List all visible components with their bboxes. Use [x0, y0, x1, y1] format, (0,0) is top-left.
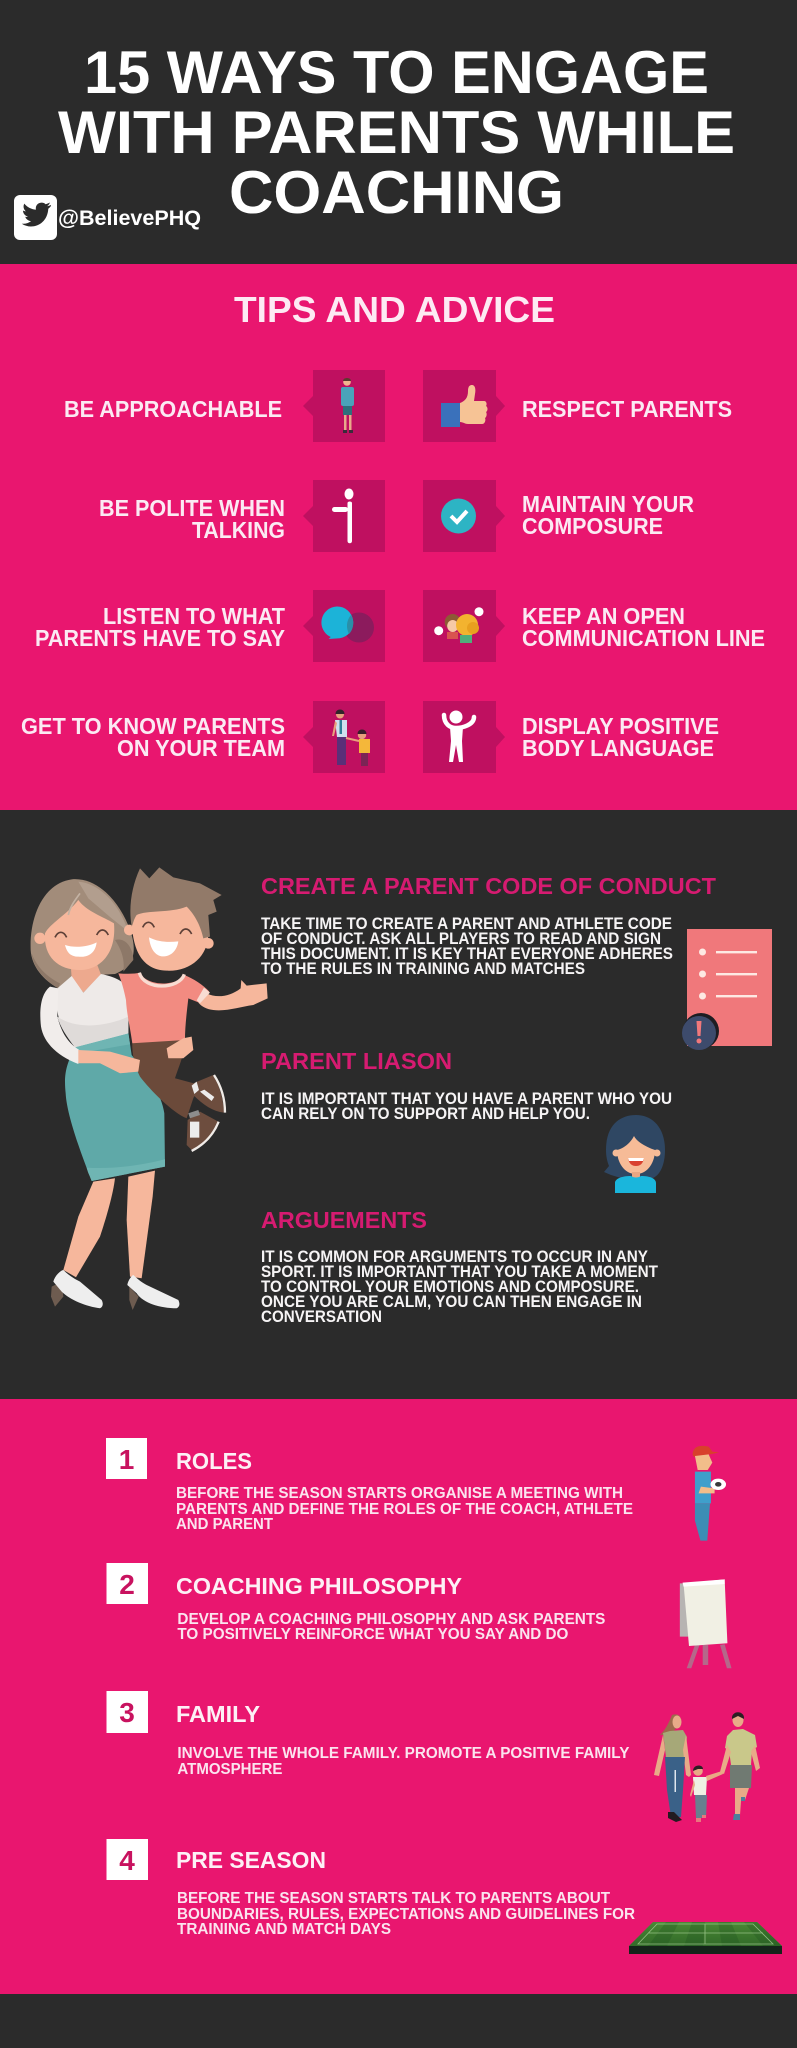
- block: create a parent code of conduct: THIS DOCUMENT. IT IS KEY THAT EVERYONE ADHERES: [261, 945, 673, 963]
- step 4: pre season: BEFORE THE SEASON STARTS TALK TO PARENTS ABOUT: [177, 1890, 610, 1907]
- icon: rules document: [682, 929, 772, 1050]
- tip: display positive body language: BODY LANGUAGE: [522, 735, 714, 761]
- block: arguements: SPORT. IT IS IMPORTANT THAT YOU TAKE A MOMENT: [261, 1263, 658, 1281]
- tip: maintain your composure: COMPOSURE: [522, 513, 663, 539]
- block: arguements: ARGUEMENTS: [261, 1207, 427, 1233]
- tip: be approachable: [64, 370, 385, 442]
- block: parent liason: IT IS IMPORTANT THAT YOU HAVE A PARENT WHO YOU: [261, 1090, 672, 1108]
- title: [58, 39, 735, 226]
- step 1: roles: [106, 1438, 633, 1533]
- step 3: family: FAMILY: [176, 1701, 260, 1727]
- step 3: family: [106, 1691, 630, 1778]
- tip: listen to what parents have to say: LISTEN TO WHAT: [103, 603, 285, 629]
- tip: be approachable: BE APPROACHABLE: [64, 396, 282, 422]
- icon: football pitch: [629, 1922, 782, 1954]
- tip: get to know parents on your team: GET TO KNOW PARENTS: [21, 713, 285, 739]
- tip: listen to what parents have to say: [35, 590, 385, 662]
- step 2: coaching philosophy: DEVELOP A COACHING PHILOSOPHY AND ASK PARENTS: [177, 1611, 606, 1628]
- panel: header: [0, 0, 797, 264]
- step 3: family: 3: [119, 1697, 135, 1728]
- tip: respect parents: RESPECT PARENTS: [522, 396, 732, 422]
- step 1: roles: PARENTS AND DEFINE THE ROLES OF THE COACH, ATHLETE: [176, 1501, 633, 1518]
- panel: parent communication: [0, 810, 797, 1399]
- block: parent liason: PARENT LIASON: [261, 1048, 452, 1074]
- icon: smiling parent: [604, 1115, 665, 1193]
- block: create a parent code of conduct: [261, 873, 716, 978]
- tip: get to know parents on your team: ON YOUR TEAM: [117, 735, 285, 761]
- block: create a parent code of conduct: CREATE A PARENT CODE OF CONDUCT: [261, 873, 716, 899]
- step 3: family: INVOLVE THE WHOLE FAMILY. PROMOTE A POSITIVE FAMILY: [177, 1745, 630, 1762]
- title: WITH PARENTS WHILE: [58, 99, 735, 166]
- twitter handle: @BelievePHQ: [58, 207, 201, 230]
- tip: respect parents: [423, 370, 732, 442]
- tip: maintain your composure: [423, 480, 694, 552]
- tip: display positive body language: [423, 701, 719, 773]
- step 2: coaching philosophy: COACHING PHILOSOPHY: [176, 1573, 462, 1599]
- block: create a parent code of conduct: OF CONDUCT. ASK ALL PLAYERS TO READ AND SIGN: [261, 930, 661, 948]
- icon: coach with ball: [693, 1446, 726, 1541]
- tip: listen to what parents have to say: PARENTS HAVE TO SAY: [35, 625, 285, 651]
- block: create a parent code of conduct: TAKE TIME TO CREATE A PARENT AND ATHLETE CODE: [261, 915, 672, 933]
- step 1: roles: 1: [119, 1444, 134, 1475]
- tip: keep an open communication line: [423, 590, 765, 662]
- step 4: pre season: [106, 1839, 635, 1938]
- step 1: roles: BEFORE THE SEASON STARTS ORGANISE A MEETING WITH: [176, 1485, 623, 1502]
- step 2: coaching philosophy: [106, 1563, 606, 1643]
- step 2: coaching philosophy: 2: [119, 1569, 135, 1600]
- block: arguements: TO CONTROL YOUR EMOTIONS AND COMPOSURE.: [261, 1278, 639, 1296]
- step 4: pre season: 4: [119, 1845, 135, 1876]
- tip: get to know parents on your team: [21, 701, 385, 773]
- tip: maintain your composure: MAINTAIN YOUR: [522, 491, 694, 517]
- step 2: coaching philosophy: TO POSITIVELY REINFORCE WHAT YOU SAY AND DO: [177, 1626, 568, 1643]
- block: arguements: ONCE YOU ARE CALM, YOU CAN THEN ENGAGE IN: [261, 1293, 642, 1311]
- block: parent liason: CAN RELY ON TO SUPPORT AND HELP YOU.: [261, 1105, 590, 1123]
- tip: be polite when talking: BE POLITE WHEN: [99, 495, 285, 521]
- icon: twitter: [14, 195, 57, 240]
- panel: footer band: [0, 1994, 797, 2048]
- panel: tips and advice: [0, 264, 797, 810]
- step 4: pre season: PRE SEASON: [176, 1847, 326, 1873]
- step 3: family: ATMOSPHERE: [177, 1761, 283, 1778]
- block: parent liason: [261, 1048, 672, 1123]
- step 4: pre season: BOUNDARIES, RULES, EXPECTATIONS AND GUIDELINES FOR: [177, 1906, 635, 1923]
- block: arguements: CONVERSATION: [261, 1308, 382, 1326]
- panel: numbered steps: [0, 1399, 797, 1994]
- block: create a parent code of conduct: TO THE RULES IN TRAINING AND MATCHES: [261, 960, 585, 978]
- tip: be polite when talking: TALKING: [192, 517, 285, 543]
- tip: keep an open communication line: COMMUNICATION LINE: [522, 625, 765, 651]
- step 1: roles: AND PARENT: [176, 1516, 273, 1533]
- step 1: roles: ROLES: [176, 1448, 252, 1474]
- skirt: [65, 1033, 165, 1181]
- block: arguements: [261, 1207, 658, 1326]
- heading: tips and advice: TIPS AND ADVICE: [234, 289, 555, 330]
- icon: family walking: [654, 1712, 760, 1822]
- icon: flip chart: [680, 1579, 732, 1668]
- title: 15 WAYS TO ENGAGE: [84, 39, 709, 106]
- title: COACHING: [229, 159, 564, 226]
- illustration: mother holding child: [31, 867, 268, 1310]
- block: arguements: IT IS COMMON FOR ARGUMENTS TO OCCUR IN ANY: [261, 1248, 648, 1266]
- tip: display positive body language: DISPLAY POSITIVE: [522, 713, 719, 739]
- tip: keep an open communication line: KEEP AN OPEN: [522, 603, 685, 629]
- tip: be polite when talking: [99, 480, 385, 552]
- step 4: pre season: TRAINING AND MATCH DAYS: [177, 1921, 391, 1938]
